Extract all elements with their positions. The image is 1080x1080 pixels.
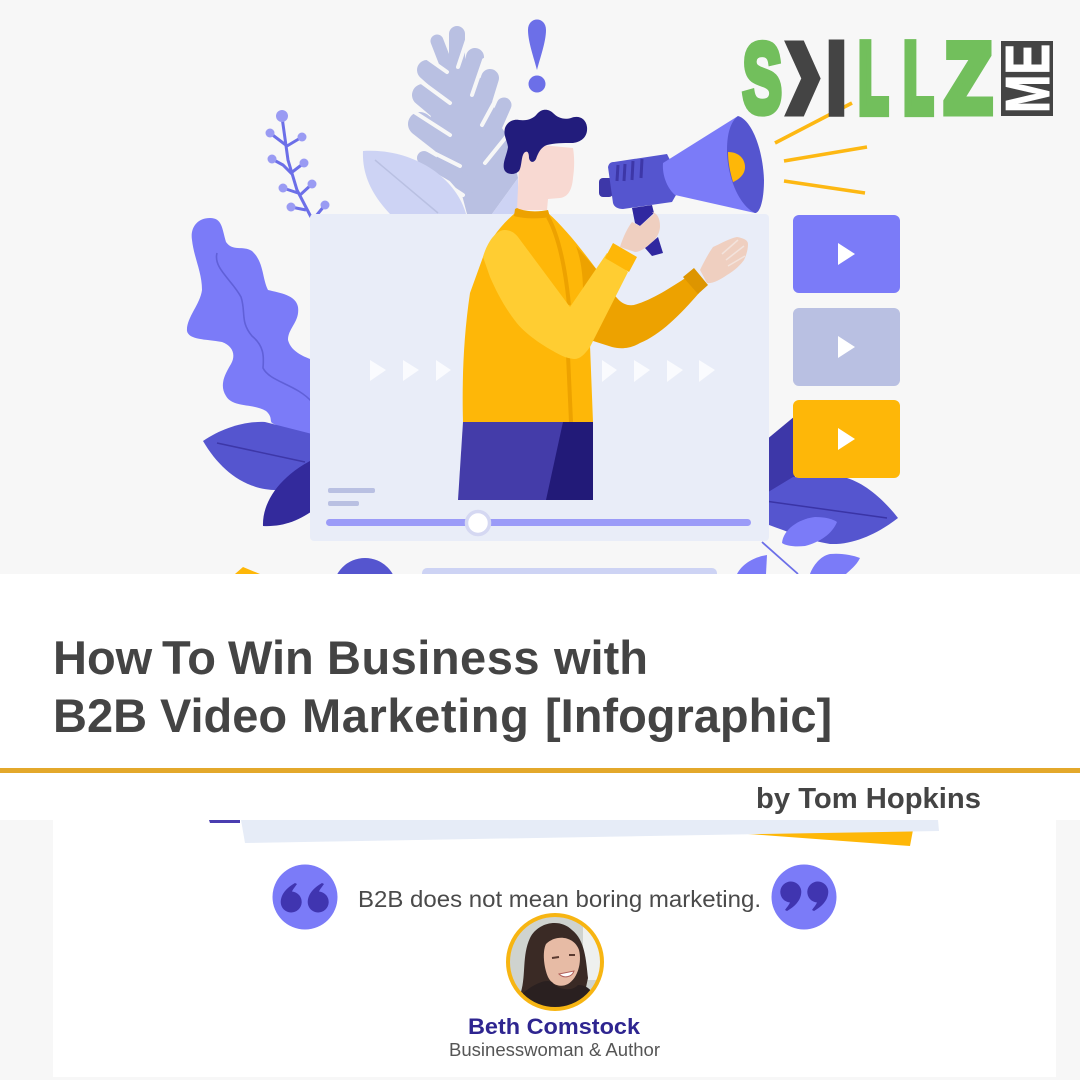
logo letter L: L: [859, 24, 888, 134]
plant: fern leaf: [408, 34, 518, 214]
icon: closing quote: [772, 864, 836, 930]
caption lines: [328, 488, 375, 506]
head: [517, 143, 574, 210]
logo letter Z: Z: [944, 23, 992, 133]
portrait: Beth Comstock: [505, 912, 605, 1012]
title: B2B: [53, 689, 147, 742]
icon: right play arrows: [602, 360, 715, 382]
icon: opening quote: [272, 864, 338, 930]
gold divider: [0, 768, 1080, 773]
bell rim: [727, 116, 764, 213]
torso folds: [548, 217, 597, 422]
panel: quote card: [209, 820, 939, 1056]
title: Video: [160, 689, 287, 742]
icon: megaphone: [599, 116, 764, 256]
title: [53, 631, 832, 742]
byline: by Tom Hopkins: [756, 783, 981, 815]
progress knob: [466, 512, 490, 534]
collar: [514, 208, 550, 218]
card: purple: [793, 215, 900, 293]
plant: pale leaf: [363, 151, 518, 214]
icon: exclamation mark: [528, 20, 546, 92]
title: with: [553, 631, 648, 684]
back arm: [590, 237, 748, 348]
title: Win: [228, 631, 314, 684]
hair: [504, 110, 587, 174]
icon: left play arrows: [370, 360, 451, 381]
title band: [0, 574, 1080, 820]
title: To: [162, 631, 216, 684]
plant: dark leaves on left: [203, 422, 320, 526]
ridges: [617, 159, 642, 181]
torso: [463, 213, 597, 422]
quote text: B2B does not mean boring marketing.: [358, 886, 761, 912]
author name: Beth Comstock: [468, 1014, 641, 1039]
plant: dark leaves on right: [760, 416, 898, 546]
shorts: [458, 422, 593, 500]
lower handle: [645, 237, 663, 256]
fern gaps: [408, 40, 510, 195]
title: How: [53, 631, 153, 684]
panel: video player: [310, 214, 769, 541]
card: yellow: [793, 400, 900, 478]
torn paper strip: [209, 820, 939, 846]
plant: large wavy purple leaf: [187, 218, 320, 445]
holding hand: [620, 212, 660, 252]
figure: man with megaphone: [458, 110, 764, 500]
handle: [632, 205, 654, 226]
title: Marketing: [302, 689, 529, 742]
logo letter L: L: [904, 24, 933, 134]
barrel: [608, 154, 676, 209]
plant: sprig with berries: [266, 110, 330, 217]
plant: small leaves at panel base: [737, 542, 860, 574]
cuff: [605, 243, 637, 272]
rear knob: [599, 178, 613, 197]
title: Business: [327, 631, 540, 684]
cone: [663, 116, 755, 213]
clipped shapes above title band: [235, 558, 717, 622]
author role: Businesswoman & Author: [449, 1040, 660, 1060]
title: [Infographic]: [545, 689, 832, 742]
video cards: [793, 215, 900, 478]
progress bar: [326, 519, 751, 526]
sound lines: [775, 103, 867, 193]
speaker: [728, 152, 745, 182]
card: grey: [793, 308, 900, 386]
front arm: [483, 230, 628, 359]
logo box ME: ME: [994, 44, 1063, 113]
logo: Skillz Me: [743, 23, 1063, 134]
logo letter S: S: [743, 25, 782, 134]
logo letter I: I: [828, 23, 845, 133]
logo chevron K: ❯: [785, 37, 822, 111]
